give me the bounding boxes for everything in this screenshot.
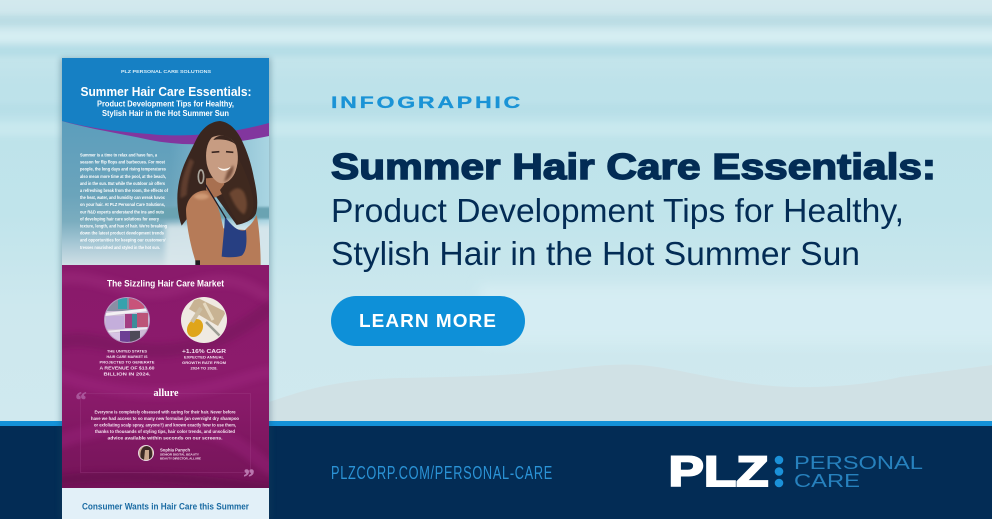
website url: PLZCORP.COM/PERSONAL-CARE: [331, 463, 553, 483]
stat: cagr: EXPECTED ANNUAL: [184, 354, 225, 359]
stat: cagr: GROWTH RATE FROM: [182, 360, 226, 365]
attribution: Sophia Panych: [160, 448, 190, 454]
footer band: [0, 421, 992, 519]
market heading: The Sizzling Hair Care Market: [107, 278, 225, 290]
intro paragraph: our R&D experts understand the ins and outs: [80, 209, 164, 214]
panel: consumer wants: Consumer Wants in Hair Care this Summer: [82, 502, 249, 512]
quote text: [91, 410, 239, 440]
earring: [198, 170, 204, 183]
intro paragraph: and in the sun. But while the outdoor air offers: [80, 181, 165, 186]
intro paragraph: [80, 152, 168, 250]
allure logo: allure: [154, 388, 179, 399]
panel: consumer wants: [62, 488, 269, 519]
quote text: advice available within seconds on our screens.: [108, 436, 222, 440]
intro paragraph: and opportunities for keeping our customers': [80, 238, 166, 243]
intro paragraph: Summer is a time to relax and have fun, a: [80, 152, 157, 158]
image: store shelves circle: [104, 297, 150, 343]
logo: PLZ personal care: CARE: [794, 471, 860, 491]
arm and torso: [186, 190, 261, 265]
stat: market revenue: THE UNITED STATES: [107, 348, 147, 354]
intro paragraph: texture, length, and hue of hair. We're breaking: [80, 224, 167, 228]
face: [206, 135, 238, 183]
stat: market revenue: A REVENUE OF $13.60: [100, 366, 155, 372]
quote text: thanks to thousands of styling tips, hair color trends, and unsolicited: [95, 429, 235, 434]
quote frame: [76, 387, 254, 489]
quote text: Everyone is completely obsessed with caring for their hair. Never before: [94, 410, 236, 414]
bikini: [222, 217, 246, 257]
attribution: SENIOR DIGITAL BEAUTY: [160, 452, 199, 456]
quote text: have we had access to so many new formulas (an overnight dry shampoo: [91, 416, 239, 421]
attribution: [160, 448, 201, 460]
button: learn more: [331, 296, 525, 346]
intro paragraph: also mean more time at the pool, at the beach,: [80, 174, 166, 179]
stat: cagr: 2024 TO 2028.: [190, 366, 218, 370]
intro paragraph: down the latest product development trends: [80, 231, 164, 236]
header text: Summer Hair Care Essentials:: [80, 85, 252, 99]
stat: market revenue: HAIR CARE MARKET IS: [106, 354, 148, 359]
intro paragraph: season for flip flops and barbecues. For most: [80, 160, 165, 165]
intro paragraph: of developing hair care solutions for every: [80, 216, 159, 221]
intro paragraph: a refreshing break from the room, the effects of: [80, 188, 168, 193]
stat: cagr: [182, 349, 226, 370]
icon: logo dots: [775, 456, 783, 487]
header text: [80, 69, 252, 118]
attribution: BEAUTY DIRECTOR, ALLURE: [160, 456, 201, 460]
panel: photo hero area: [62, 58, 275, 269]
header text: Stylish Hair in the Hot Summer Sun: [102, 109, 229, 118]
headline: [331, 146, 936, 272]
icon: opening quote mark: “: [76, 387, 86, 412]
logo: PLZ personal care: PLZ: [668, 448, 768, 496]
intro paragraph: tresses nourished and styled in the hot sun.: [80, 245, 160, 250]
stat: cagr: +1.16% CAGR: [182, 349, 226, 355]
stat: market revenue: PROJECTED TO GENERATE: [100, 360, 155, 364]
illustration: woman at the beach: [177, 121, 261, 265]
panel drop shadow: [60, 58, 271, 519]
stat: market revenue: [100, 348, 155, 378]
header text: Product Development Tips for Healthy,: [97, 100, 234, 108]
sandy shore: [269, 364, 992, 426]
headline: Product Development Tips for Healthy,: [331, 192, 904, 229]
logo: PLZ personal care: [668, 448, 923, 496]
back hair: [177, 121, 257, 226]
panel: sizzling hair care market: [62, 265, 269, 488]
infographic thumbnail panel: [50, 58, 280, 519]
panel: blue header with purple curve: [62, 58, 269, 144]
eyebrow label: INFOGRAPHIC: [331, 93, 523, 112]
intro paragraph: people, the long days and rising temperatures: [80, 167, 166, 172]
intro paragraph: the heat, water, and humidity can wreak havoc: [80, 195, 165, 200]
image: oil and comb circle: [181, 297, 227, 343]
intro paragraph: on your hair. At PLZ Personal Care Solutions,: [80, 202, 165, 207]
quote text: or exfoliating scalp spray, anyone?) and known exactly how to use them,: [94, 422, 236, 428]
logo: PLZ personal care: PERSONAL: [794, 453, 923, 473]
avatar: quoted editor: [138, 445, 154, 461]
headline: Stylish Hair in the Hot Summer Sun: [331, 235, 860, 272]
headline: Summer Hair Care Essentials:: [331, 146, 936, 187]
hair strands over shoulder: [220, 184, 224, 194]
icon: closing quote mark: ”: [244, 464, 254, 489]
button: learn more: LEARN MORE: [359, 311, 497, 331]
header text: PLZ PERSONAL CARE SOLUTIONS: [121, 69, 211, 74]
stat: market revenue: BILLION IN 2024.: [104, 372, 150, 378]
